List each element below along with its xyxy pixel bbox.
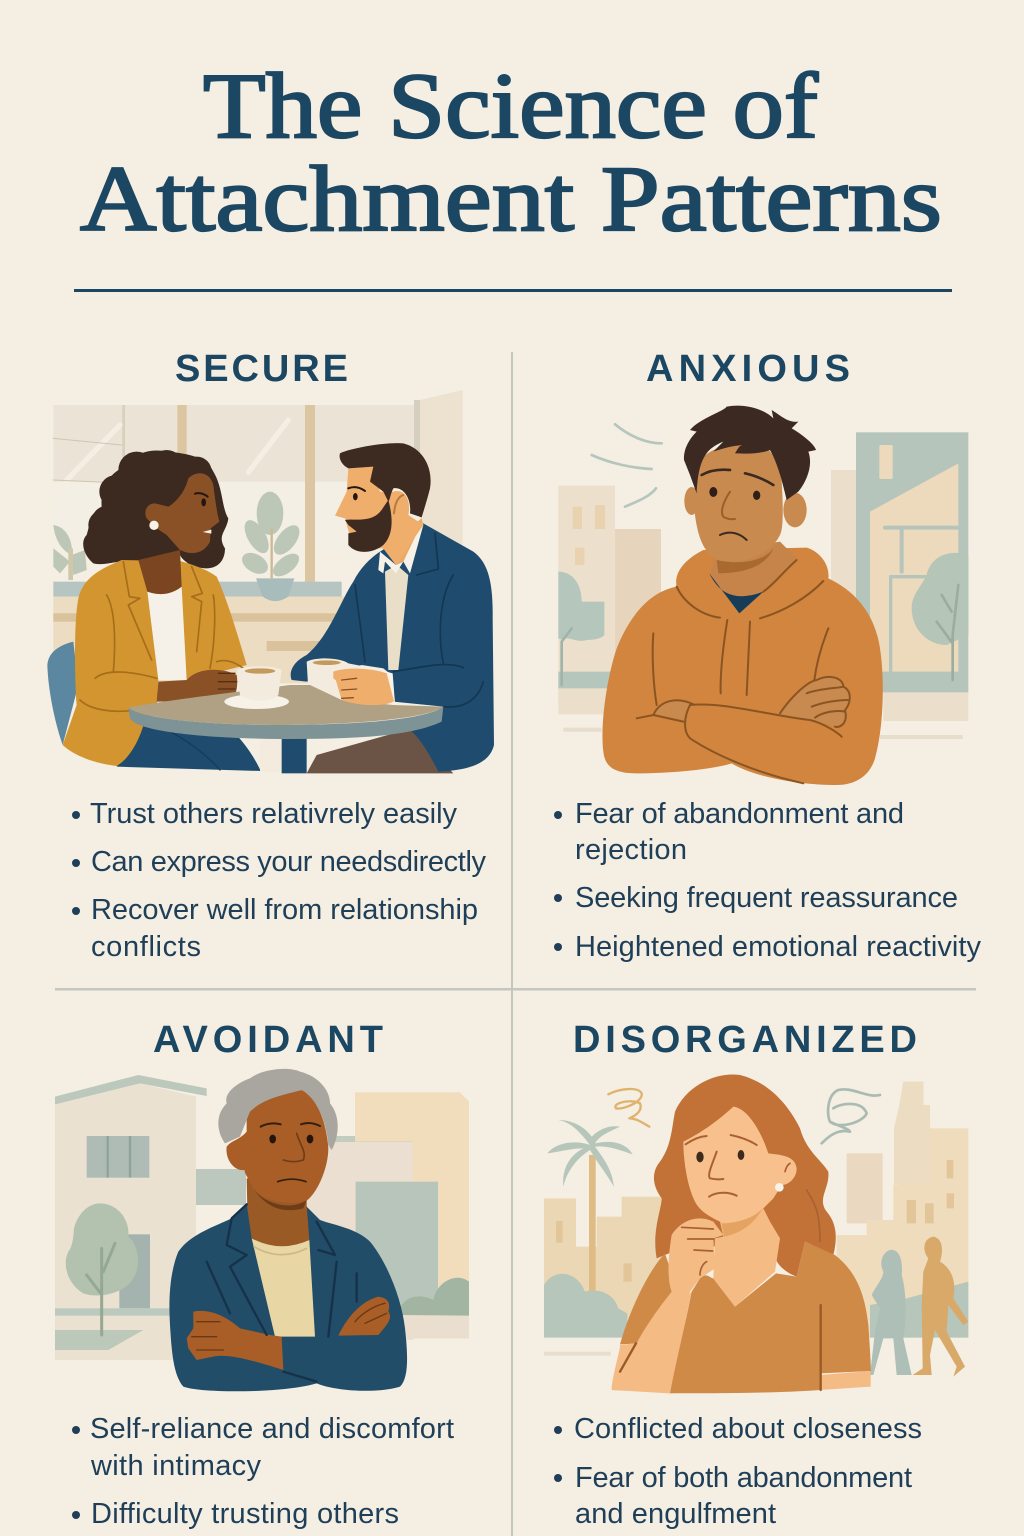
bullets: secure: Recover well from relationship xyxy=(91,894,478,926)
bullets: anxious: rejection xyxy=(575,834,687,866)
panel: avoidant xyxy=(55,1019,469,1530)
bullets: avoidant: with intimacy xyxy=(90,1450,262,1482)
bullets: anxious: Seeking frequent reassurance xyxy=(575,882,958,914)
illustration: conflicted woman xyxy=(544,1074,968,1393)
coffee table and cups xyxy=(128,666,443,773)
panel: disorganized xyxy=(544,1019,968,1530)
heading: disorganized: DISORGANIZED xyxy=(573,1019,917,1061)
bullets: disorganized: Conflicted about closeness xyxy=(574,1413,922,1445)
title xyxy=(80,55,942,251)
person xyxy=(169,1069,407,1391)
heading: avoidant: AVOIDANT xyxy=(153,1019,383,1061)
title: Attachment Patterns xyxy=(80,148,942,251)
illustration: anxious man in hoodie xyxy=(558,406,968,785)
plants xyxy=(53,492,304,601)
illustration: couple talking at cafe table xyxy=(47,390,494,773)
bullets: disorganized xyxy=(554,1413,922,1530)
bullets: anxious: Fear of abandonment and xyxy=(575,798,904,830)
woman xyxy=(612,1074,871,1393)
bullets: avoidant: Self-reliance and discomfort xyxy=(90,1413,454,1445)
bullets: anxious: Heightened emotional reactivity xyxy=(575,931,982,963)
man xyxy=(291,443,494,773)
bullets: disorganized: and engulfment xyxy=(575,1498,776,1530)
heading: secure: SECURE xyxy=(175,348,348,390)
bullets: secure: Trust others relativrely easily xyxy=(90,798,458,830)
bullets: secure xyxy=(72,798,486,963)
panel: secure xyxy=(47,348,494,963)
woman xyxy=(47,450,261,771)
man xyxy=(602,406,883,785)
bullets: secure: conflicts xyxy=(91,931,201,963)
title: The Science of xyxy=(203,55,818,158)
bullets: anxious xyxy=(554,798,982,963)
bullets: avoidant: Difficulty trusting others xyxy=(91,1498,399,1530)
bullets: avoidant xyxy=(72,1413,454,1530)
bullets: secure: Can express your needsdirectly xyxy=(91,846,486,878)
illustration: avoidant person with crossed arms xyxy=(55,1069,469,1391)
panel: anxious xyxy=(554,348,982,963)
heading: anxious: ANXIOUS xyxy=(646,348,850,390)
bullets: disorganized: Fear of both abandonment xyxy=(575,1462,912,1494)
